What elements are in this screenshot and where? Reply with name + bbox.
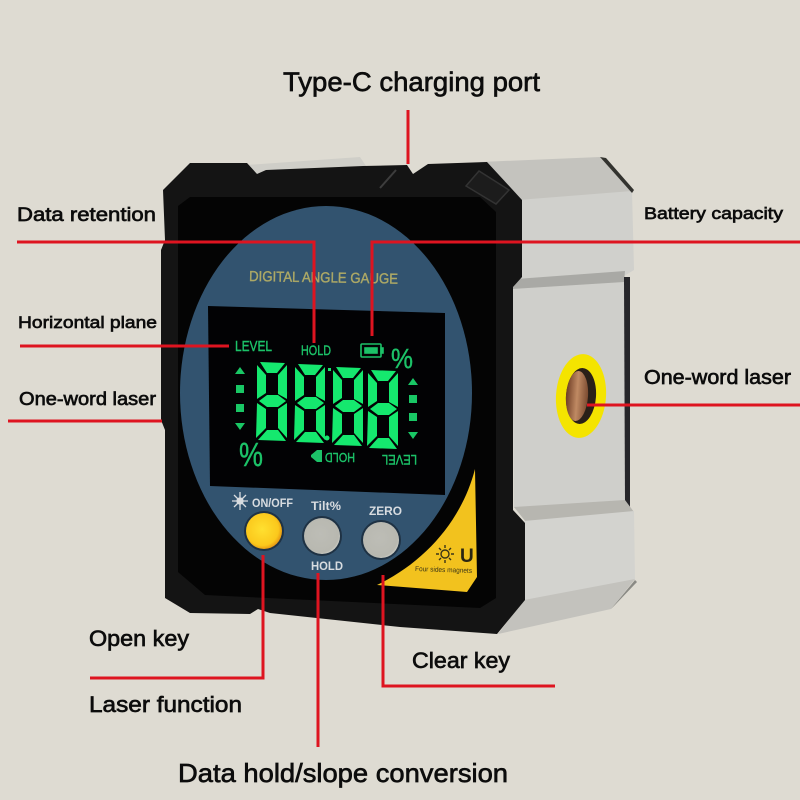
digit four — [367, 370, 398, 449]
gray zero button — [361, 520, 401, 560]
right level indicators — [408, 378, 418, 439]
laser lens — [553, 352, 609, 440]
hold label: HOLD — [301, 342, 331, 358]
level label: LEVEL — [235, 338, 272, 355]
icon: backlight sun — [232, 492, 248, 510]
yellow power button — [244, 511, 284, 551]
zero label: ZERO — [369, 504, 402, 518]
LCD screen — [208, 306, 445, 495]
device: angle gauge — [161, 157, 637, 634]
label: battery capacity: Battery capacity — [644, 204, 784, 223]
magnet caption: Four sides magnets — [415, 566, 473, 575]
dial title: DIGITAL ANGLE GAUGE — [249, 269, 398, 288]
inner bezel — [178, 197, 496, 608]
line: clear key — [383, 575, 555, 686]
callout lines — [8, 110, 800, 747]
digit one — [256, 362, 287, 441]
colon and decimal dots — [324, 368, 331, 440]
on/off label: ON/OFF — [252, 498, 293, 510]
silver metal side body — [480, 157, 637, 634]
icon: laser sun — [436, 545, 454, 563]
line: open key — [90, 555, 263, 678]
title: charging port: Type-C charging port — [283, 67, 541, 97]
digit two — [294, 364, 325, 443]
line: data hold — [316, 573, 320, 747]
label: right laser: One-word laser — [644, 367, 791, 389]
tilt label: Tilt% — [311, 499, 341, 513]
label: left laser: One-word laser — [19, 389, 156, 409]
icon: battery — [361, 344, 383, 357]
digit three — [332, 367, 363, 446]
corner detail — [466, 171, 509, 204]
line: right laser — [587, 404, 800, 406]
label: data hold: Data hold/slope conversion — [178, 758, 508, 788]
hold key label: HOLD — [311, 561, 343, 573]
silver top wedge — [246, 157, 366, 176]
magnet letter: U — [460, 546, 474, 567]
label: open key: Open key — [89, 626, 189, 651]
line: horizontal plane — [20, 344, 229, 348]
yellow corner badge — [377, 469, 477, 592]
icon: speaker — [311, 450, 322, 462]
black rubber housing — [161, 162, 525, 634]
label: laser function: Laser function — [89, 692, 242, 717]
inverted hold label: HOLD — [325, 450, 355, 465]
blue dial — [180, 206, 472, 580]
line: data retention — [17, 242, 314, 343]
inverted level label: LEVEL — [382, 452, 417, 468]
line: charging port — [406, 110, 410, 164]
percent bottom: % — [239, 436, 263, 473]
percent top: % — [391, 343, 413, 374]
label: data retention: Data retention — [17, 205, 156, 226]
bevel mark — [380, 170, 396, 188]
label: clear key: Clear key — [412, 648, 510, 673]
seven-segment readout — [256, 362, 398, 449]
gray tilt button — [302, 516, 342, 556]
line: battery capacity — [372, 242, 800, 336]
line: left laser — [8, 420, 162, 422]
label: horizontal plane: Horizontal plane — [18, 313, 157, 332]
left level indicators — [235, 367, 245, 430]
